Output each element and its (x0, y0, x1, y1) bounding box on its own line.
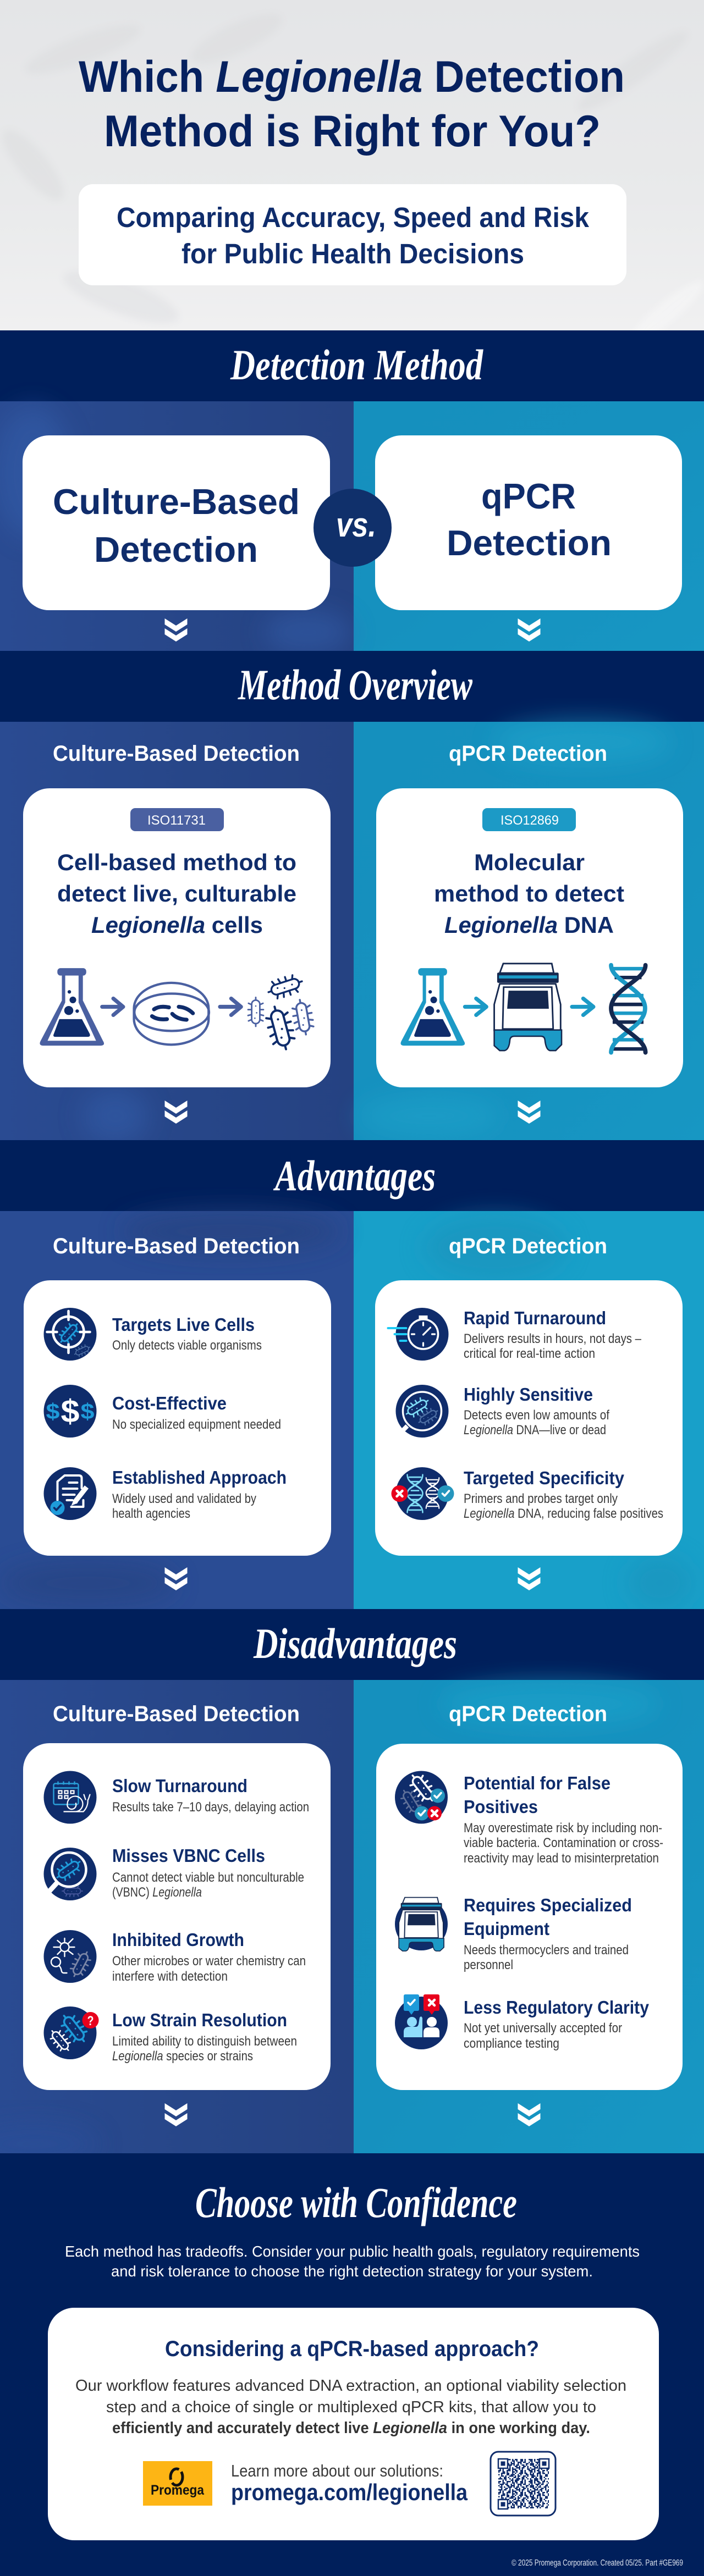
item: specialized equipment: Equipment (464, 1919, 549, 1939)
arrow: chevrons (165, 1567, 540, 1590)
item: targets live cells: Only detects viable organisms (112, 1338, 262, 1353)
item: targeted specificity: Legionella DNA, reducing false positives (464, 1506, 663, 1521)
intro paragraph (65, 2243, 640, 2280)
badge: ISO11731 (130, 808, 224, 831)
item: targeted specificity: Primers and probes target only (464, 1491, 618, 1506)
description: Legionella DNA (444, 912, 614, 938)
item: inhibited growth: interfere with detection (112, 1969, 228, 1984)
item: highly sensitive: Highly Sensitive (464, 1384, 593, 1405)
item: false positives: May overestimate risk by including non- (464, 1821, 662, 1836)
item: targets live cells: Targets Live Cells (112, 1314, 255, 1335)
badge: ISO12869 (482, 808, 576, 831)
item: targeted specificity: Targeted Specificity (464, 1468, 625, 1488)
item: established approach: health agencies (112, 1506, 190, 1521)
item: low strain resolution: Legionella species or strains (112, 2049, 253, 2064)
QR code (491, 2452, 556, 2516)
column heading: culture: Culture-Based Detection (53, 1234, 300, 1258)
icon: thermocycler (395, 1898, 448, 1951)
item: rapid turnaround: critical for real-time action (464, 1346, 595, 1361)
subtitle box: for Public Health Decisions (182, 238, 524, 269)
item: highly sensitive: Legionella DNA—live or dead (464, 1423, 606, 1438)
item: slow turnaround (112, 1776, 309, 1815)
cta heading: Considering a qPCR-based approach? (165, 2337, 539, 2361)
item: rapid turnaround: Delivers results in hours, not days – (464, 1331, 642, 1346)
panel: culture advantages (24, 1280, 331, 1556)
item: inhibited growth: Inhibited Growth (112, 1930, 244, 1950)
cta body: step and a choice of single or multiplexed qPCR kits, that allow you to (106, 2398, 596, 2416)
title (79, 52, 625, 156)
panel: qPCR disadvantages (376, 1744, 683, 2090)
icon: magnifier sensitive (396, 1385, 449, 1438)
description (434, 849, 624, 938)
panel: qPCR overview (376, 788, 683, 1087)
icon: culture workflow (40, 968, 315, 1052)
item: regulatory clarity (464, 1997, 650, 2051)
item: rapid turnaround: Rapid Turnaround (464, 1308, 606, 1328)
panel: culture overview (23, 788, 331, 1087)
description: detect live, culturable (57, 881, 296, 906)
subtitle box (79, 184, 626, 285)
column heading: qPCR: qPCR Detection (449, 742, 607, 766)
hero header (0, 0, 704, 353)
heading: disadvantages: Disadvantages (253, 1619, 457, 1667)
icon: dna specificity (392, 1467, 454, 1520)
logo: Promega (143, 2461, 212, 2506)
icon: strain resolution: ? (87, 2014, 94, 2028)
icon: stopwatch (388, 1308, 449, 1361)
item: established approach: Widely used and validated by (112, 1491, 256, 1506)
item: false positives: viable bacteria. Contamination or cross- (464, 1836, 663, 1850)
column heading: culture: Culture-Based Detection (53, 1702, 300, 1726)
title: Which Legionella Detection (79, 52, 625, 102)
cta body: efficiently and accurately detect live Legionella in one working day. (112, 2419, 590, 2437)
section: detection method (0, 330, 704, 654)
intro paragraph: Each method has tradeoffs. Consider your public health goals, regulatory requirements (65, 2243, 640, 2260)
item: low strain resolution (112, 2010, 297, 2064)
icon: document (44, 1467, 97, 1520)
badge: ISO11731: ISO11731 (147, 813, 206, 828)
item: misses VBNC: Cannot detect viable but nonculturable (112, 1870, 304, 1885)
description (57, 849, 296, 938)
badge: ISO12869: ISO12869 (501, 813, 559, 828)
cta body: Our workflow features advanced DNA extraction, an optional viability selection (75, 2377, 626, 2395)
item: low strain resolution: Low Strain Resolution (112, 2010, 287, 2030)
section: choose with confidence (0, 2153, 704, 2576)
vs badge (314, 489, 392, 567)
description: Cell-based method to (57, 849, 296, 875)
panel: qPCR advantages (375, 1280, 683, 1556)
heading: advantages: Advantages (273, 1152, 436, 1199)
cta body (75, 2377, 626, 2437)
heading: method overview: Method Overview (237, 661, 473, 709)
item: specialized equipment: personnel (464, 1958, 513, 1972)
subtitle box: Comparing Accuracy, Speed and Risk (117, 202, 590, 233)
item: established approach (112, 1467, 287, 1521)
item: false positives: reactivity may lead to misinterpretation (464, 1851, 659, 1866)
item: inhibited growth: Other microbes or water chemistry can (112, 1954, 306, 1969)
heading: choose with confidence: Choose with Confidence (195, 2179, 517, 2226)
vs badge: vs. (336, 506, 376, 544)
description: Legionella cells (91, 912, 263, 938)
heading: detection method: Detection Method (230, 341, 483, 389)
icon: calendar and snail (44, 1771, 97, 1824)
item: specialized equipment (464, 1895, 632, 1972)
item: regulatory clarity: Less Regulatory Clarity (464, 1997, 650, 2017)
item: specialized equipment: Needs thermocyclers and trained (464, 1943, 629, 1958)
item: targets live cells (112, 1314, 262, 1353)
icon: regulatory (395, 1994, 448, 2049)
item: established approach: Established Approach (112, 1467, 287, 1488)
intro paragraph: and risk tolerance to choose the right detection strategy for your system. (111, 2263, 593, 2280)
section: disadvantages (0, 1609, 704, 2166)
arrow: chevrons (165, 1101, 540, 1124)
icon: qPCR workflow (401, 964, 646, 1053)
description: method to detect (434, 881, 624, 906)
link text: promega.com/legionella (231, 2479, 468, 2505)
column heading: culture: Culture-Based Detection (53, 742, 300, 766)
icon: inhibited growth (44, 1930, 97, 1983)
icon: dollars: $ (61, 1394, 79, 1429)
item: regulatory clarity: compliance testing (464, 2036, 559, 2051)
icon: magnifier VBNC (44, 1848, 97, 1900)
item: misses VBNC: Misses VBNC Cells (112, 1845, 265, 1866)
item: specialized equipment: Requires Specialized (464, 1895, 632, 1915)
icon: dollars: $ (46, 1400, 59, 1424)
panel: call to action (48, 2308, 659, 2540)
section: advantages (0, 1140, 704, 1611)
column heading: qPCR: qPCR Detection (449, 1702, 607, 1726)
title: Method is Right for You? (104, 107, 601, 156)
item: slow turnaround: Slow Turnaround (112, 1776, 248, 1796)
link text: Learn more about our solutions: (231, 2461, 443, 2480)
card: qPCR (375, 435, 682, 610)
card: culture-based (23, 435, 330, 610)
item: inhibited growth (112, 1930, 306, 1984)
icon: dollars (44, 1385, 97, 1438)
panel: culture disadvantages (23, 1743, 331, 2090)
logo: Promega: Promega (151, 2483, 205, 2498)
arrow: chevrons (165, 2103, 540, 2126)
item: misses VBNC (112, 1845, 304, 1900)
item: highly sensitive: Detects even low amounts of (464, 1408, 609, 1423)
item: cost-effective (112, 1393, 281, 1432)
link text (231, 2461, 468, 2505)
description: Molecular (474, 849, 585, 875)
column heading: qPCR: qPCR Detection (449, 1234, 607, 1258)
item: false positives: Potential for False (464, 1773, 610, 1793)
item: cost-effective: Cost-Effective (112, 1393, 227, 1413)
item: false positives: Positives (464, 1796, 538, 1817)
item: low strain resolution: Limited ability to distinguish between (112, 2034, 297, 2049)
icon: strain resolution (44, 2006, 99, 2059)
card: qPCR: Detection (447, 523, 612, 563)
item: rapid turnaround (464, 1308, 642, 1361)
item: highly sensitive (464, 1384, 609, 1438)
card: qPCR: qPCR (481, 476, 576, 516)
icon: false positives (395, 1770, 448, 1824)
item: targeted specificity (464, 1468, 663, 1521)
item: false positives (464, 1773, 663, 1866)
icon: target (44, 1308, 97, 1361)
section: method overview (0, 651, 704, 1143)
item: slow turnaround: Results take 7–10 days, delaying action (112, 1800, 309, 1815)
card: culture-based: Culture-Based (53, 482, 300, 522)
icon: dollars: $ (80, 1400, 95, 1424)
item: misses VBNC: (VBNC) Legionella (112, 1885, 202, 1900)
item: regulatory clarity: Not yet universally accepted for (464, 2021, 622, 2036)
arrow: chevrons (165, 618, 540, 642)
item: cost-effective: No specialized equipment needed (112, 1417, 281, 1432)
card: culture-based: Detection (94, 529, 258, 570)
